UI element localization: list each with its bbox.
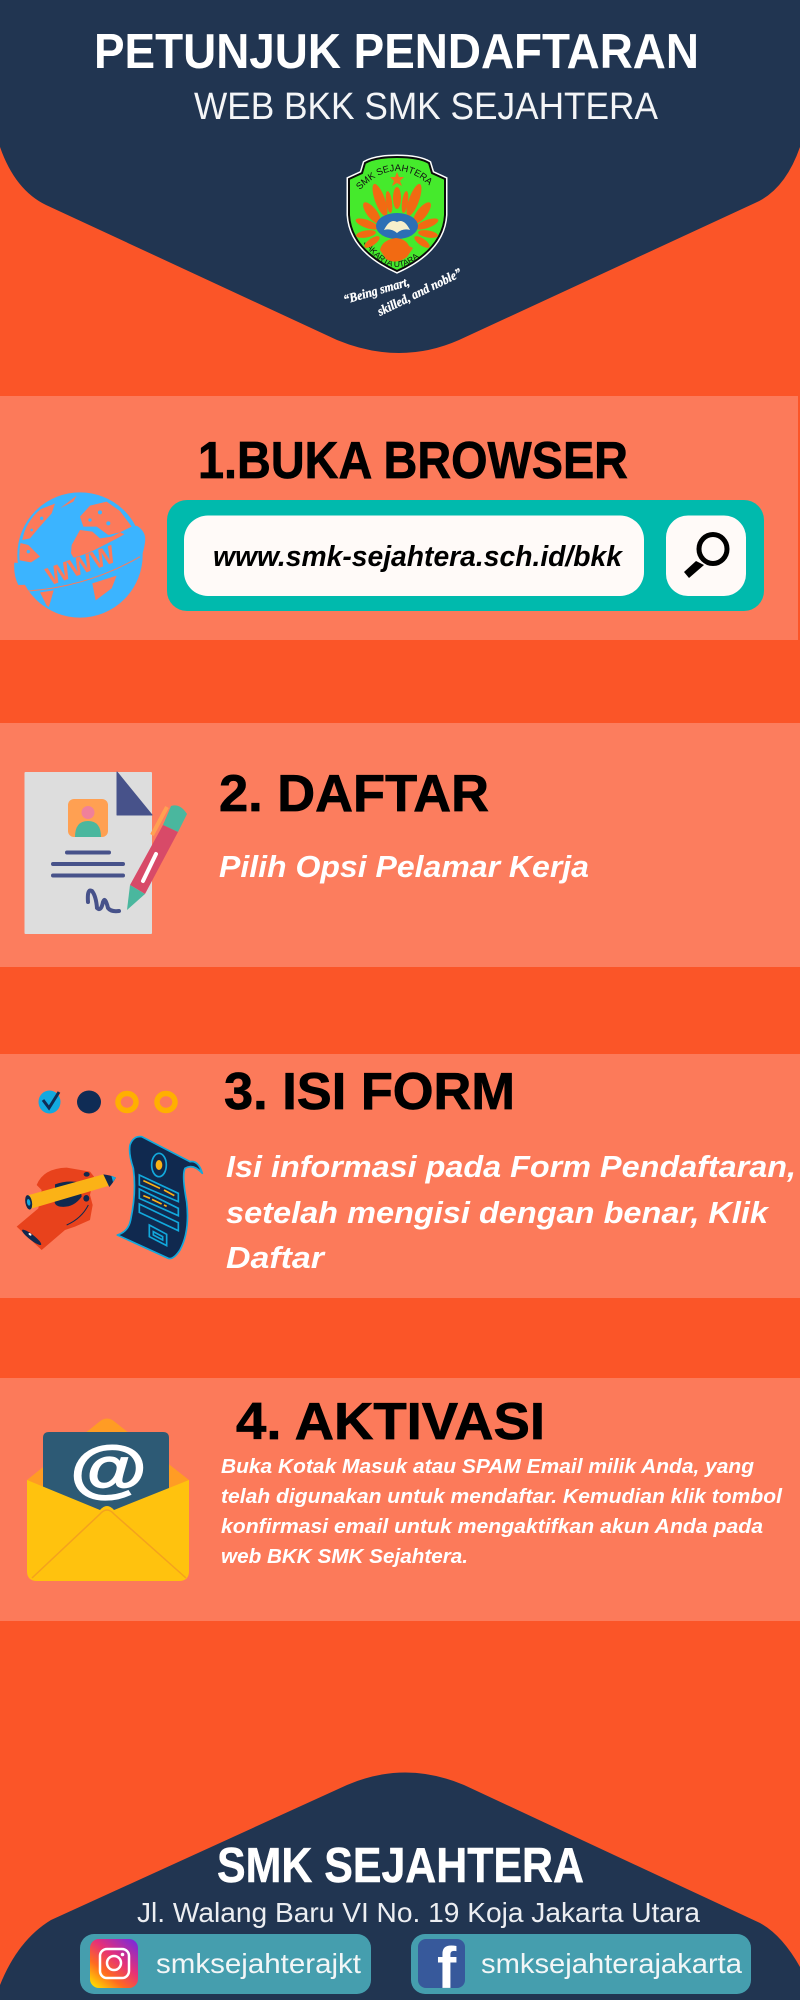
icon: facebook: f [437,1936,457,2000]
panel: step 4 [0,1378,800,1621]
panel: step 3 [0,1054,800,1298]
url field [184,516,644,596]
facebook pill: smksejahterajakarta [481,1948,742,1979]
text: step 2: Pilih Opsi Pelamar Kerja [219,849,589,884]
instagram pill [80,1934,371,1994]
heading: step 2: 2. DAFTAR [219,765,489,823]
facebook pill [411,1934,751,2000]
progress dots [38,1090,175,1114]
icon: document and pen [24,772,187,934]
text: step 3: setelah mengisi dengan benar, Klik [226,1195,770,1230]
title: PETUNJUK PENDAFTARAN [94,25,699,79]
school logo: JAKARTA UTARA [364,242,419,267]
text: step 4: Buka Kotak Masuk atau SPAM Email milik Anda, yang [221,1456,754,1478]
panel: step 2 [0,723,800,967]
icon: globe www: WWW [42,540,119,591]
text: step 4: web BKK SMK Sejahtera. [221,1546,468,1568]
motto [342,265,464,319]
heading: step 3: 3. ISI FORM [224,1063,515,1121]
header shape [0,0,800,353]
icon: facebook [418,1936,465,2000]
footer shape [0,1772,800,2000]
subtitle: WEB BKK SMK SEJAHTERA [194,86,659,128]
footer heading: SMK SEJAHTERA [217,1839,584,1893]
text: step 4: telah digunakan untuk mendaftar. Kemudian klik tombol [221,1486,782,1508]
icon: globe www [14,493,145,617]
address: Jl. Walang Baru VI No. 19 Koja Jakarta Utara [137,1897,700,1928]
motto: “Being smart, [342,274,411,307]
search bar [167,500,764,611]
search button [666,516,746,596]
heading: step 4: 4. AKTIVASI [236,1393,545,1451]
text: step 4 [221,1456,782,1568]
school logo [346,154,448,274]
url field: www.smk-sejahtera.sch.id/bkk [213,541,624,573]
panel: step 1 [0,396,798,640]
text: step 3 [226,1149,796,1275]
icon: instagram [90,1939,138,1988]
text: step 3: Daftar [226,1240,326,1275]
icon: email envelope: @ [70,1434,147,1504]
heading: step 1: 1.BUKA BROWSER [198,432,628,490]
text: step 4: konfirmasi email untuk mengaktifkan akun Anda pada [221,1516,763,1538]
icon: email envelope [27,1418,189,1581]
text: step 3: Isi informasi pada Form Pendaftaran, [226,1149,796,1184]
motto: skilled, and noble” [374,265,464,319]
icon: hand with pencil and form scroll [17,1137,202,1259]
instagram pill: smksejahterajkt [156,1948,361,1979]
school logo: SMK SEJAHTERA [356,164,432,189]
